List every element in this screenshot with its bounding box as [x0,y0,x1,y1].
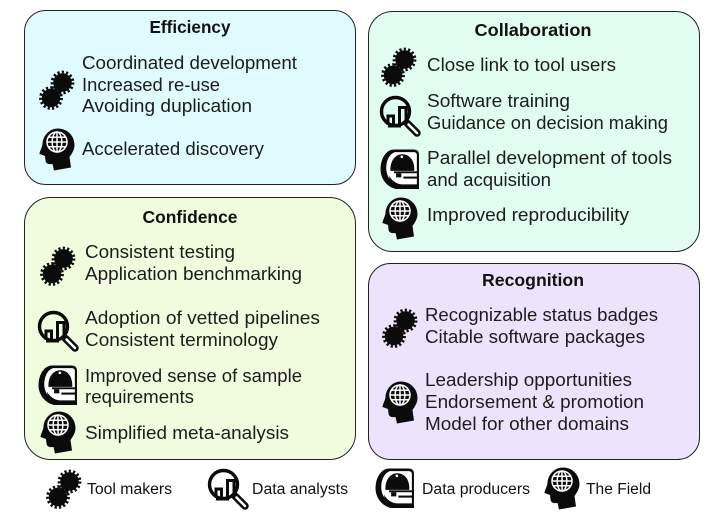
text block: training: Software training [427,91,570,111]
text: accelerated discovery: Accelerated discovery [82,139,264,159]
legend item: Data analysts: Data analysts [252,481,348,498]
icon: gears [384,310,416,346]
legend item: Tool makers: Tool makers [87,481,172,498]
text block: badges: Citable software packages [425,327,645,347]
text block: efficiency tool maker benefits: Increased re-use [82,75,220,95]
icon: magnifier chart [40,312,75,348]
icon: gears [40,72,73,108]
text: reproducibility: Improved reproducibility [427,205,629,225]
text block: pipelines: Consistent terminology [85,330,278,350]
icon: head with globe [382,198,418,240]
legend item: The Field [544,468,651,510]
panel: Recognition [368,264,700,460]
icon: head with globe [40,412,76,454]
icon: magnifier chart [382,98,417,133]
legend item: Data analysts [210,470,348,506]
text block: sample requirements: requirements [85,387,194,407]
heading: Confidence: Confidence [142,207,238,227]
text block: testing [85,242,302,284]
text block: leadership: Leadership opportunities [425,370,632,390]
text block: leadership: Model for other domains [425,414,629,434]
text block: parallel development [427,148,672,190]
panel: Collaboration [368,12,700,252]
icon: gears [42,248,74,284]
text: meta-analysis: Simplified meta-analysis [85,423,289,443]
heading: Collaboration: Collaboration [474,20,592,40]
icon: scanner [381,150,419,189]
legend item: Data producers [376,469,530,508]
text block: efficiency tool maker benefits [82,53,297,116]
text block: pipelines: Adoption of vetted pipelines [85,308,320,328]
text block: parallel development: and acquisition [427,170,551,190]
panel: Confidence [24,198,356,460]
icon: head with globe [40,128,74,170]
text block: badges: Recognizable status badges [425,305,658,325]
text block: badges [425,305,658,347]
text block: training [427,91,668,133]
text block: pipelines [85,308,320,350]
heading: Efficiency: Efficiency [150,17,231,37]
legend [48,468,651,510]
icon: gears [382,49,415,86]
text block: testing: Application benchmarking [85,264,302,284]
text block: efficiency tool maker benefits: Coordinated development [82,53,297,73]
legend item: Tool makers [48,471,172,508]
text block: efficiency tool maker benefits: Avoiding duplication [82,96,252,116]
text block: sample requirements [85,366,302,407]
icon: scanner [39,366,77,405]
panel: Efficiency [24,10,356,184]
text block: leadership: Endorsement & promotion [425,392,644,412]
icon: head with globe [382,382,418,424]
legend item: Data producers: Data producers [422,481,530,498]
text block: sample requirements: Improved sense of sample [85,366,302,386]
heading: Recognition: Recognition [482,270,584,290]
legend item: The Field: The Field [586,481,651,498]
text block: testing: Consistent testing [85,242,235,262]
text block: leadership [425,370,644,434]
text block: training: Guidance on decision making [427,113,668,133]
text block: parallel development: Parallel development of tools [427,148,672,168]
text: close link: Close link to tool users [427,55,616,75]
